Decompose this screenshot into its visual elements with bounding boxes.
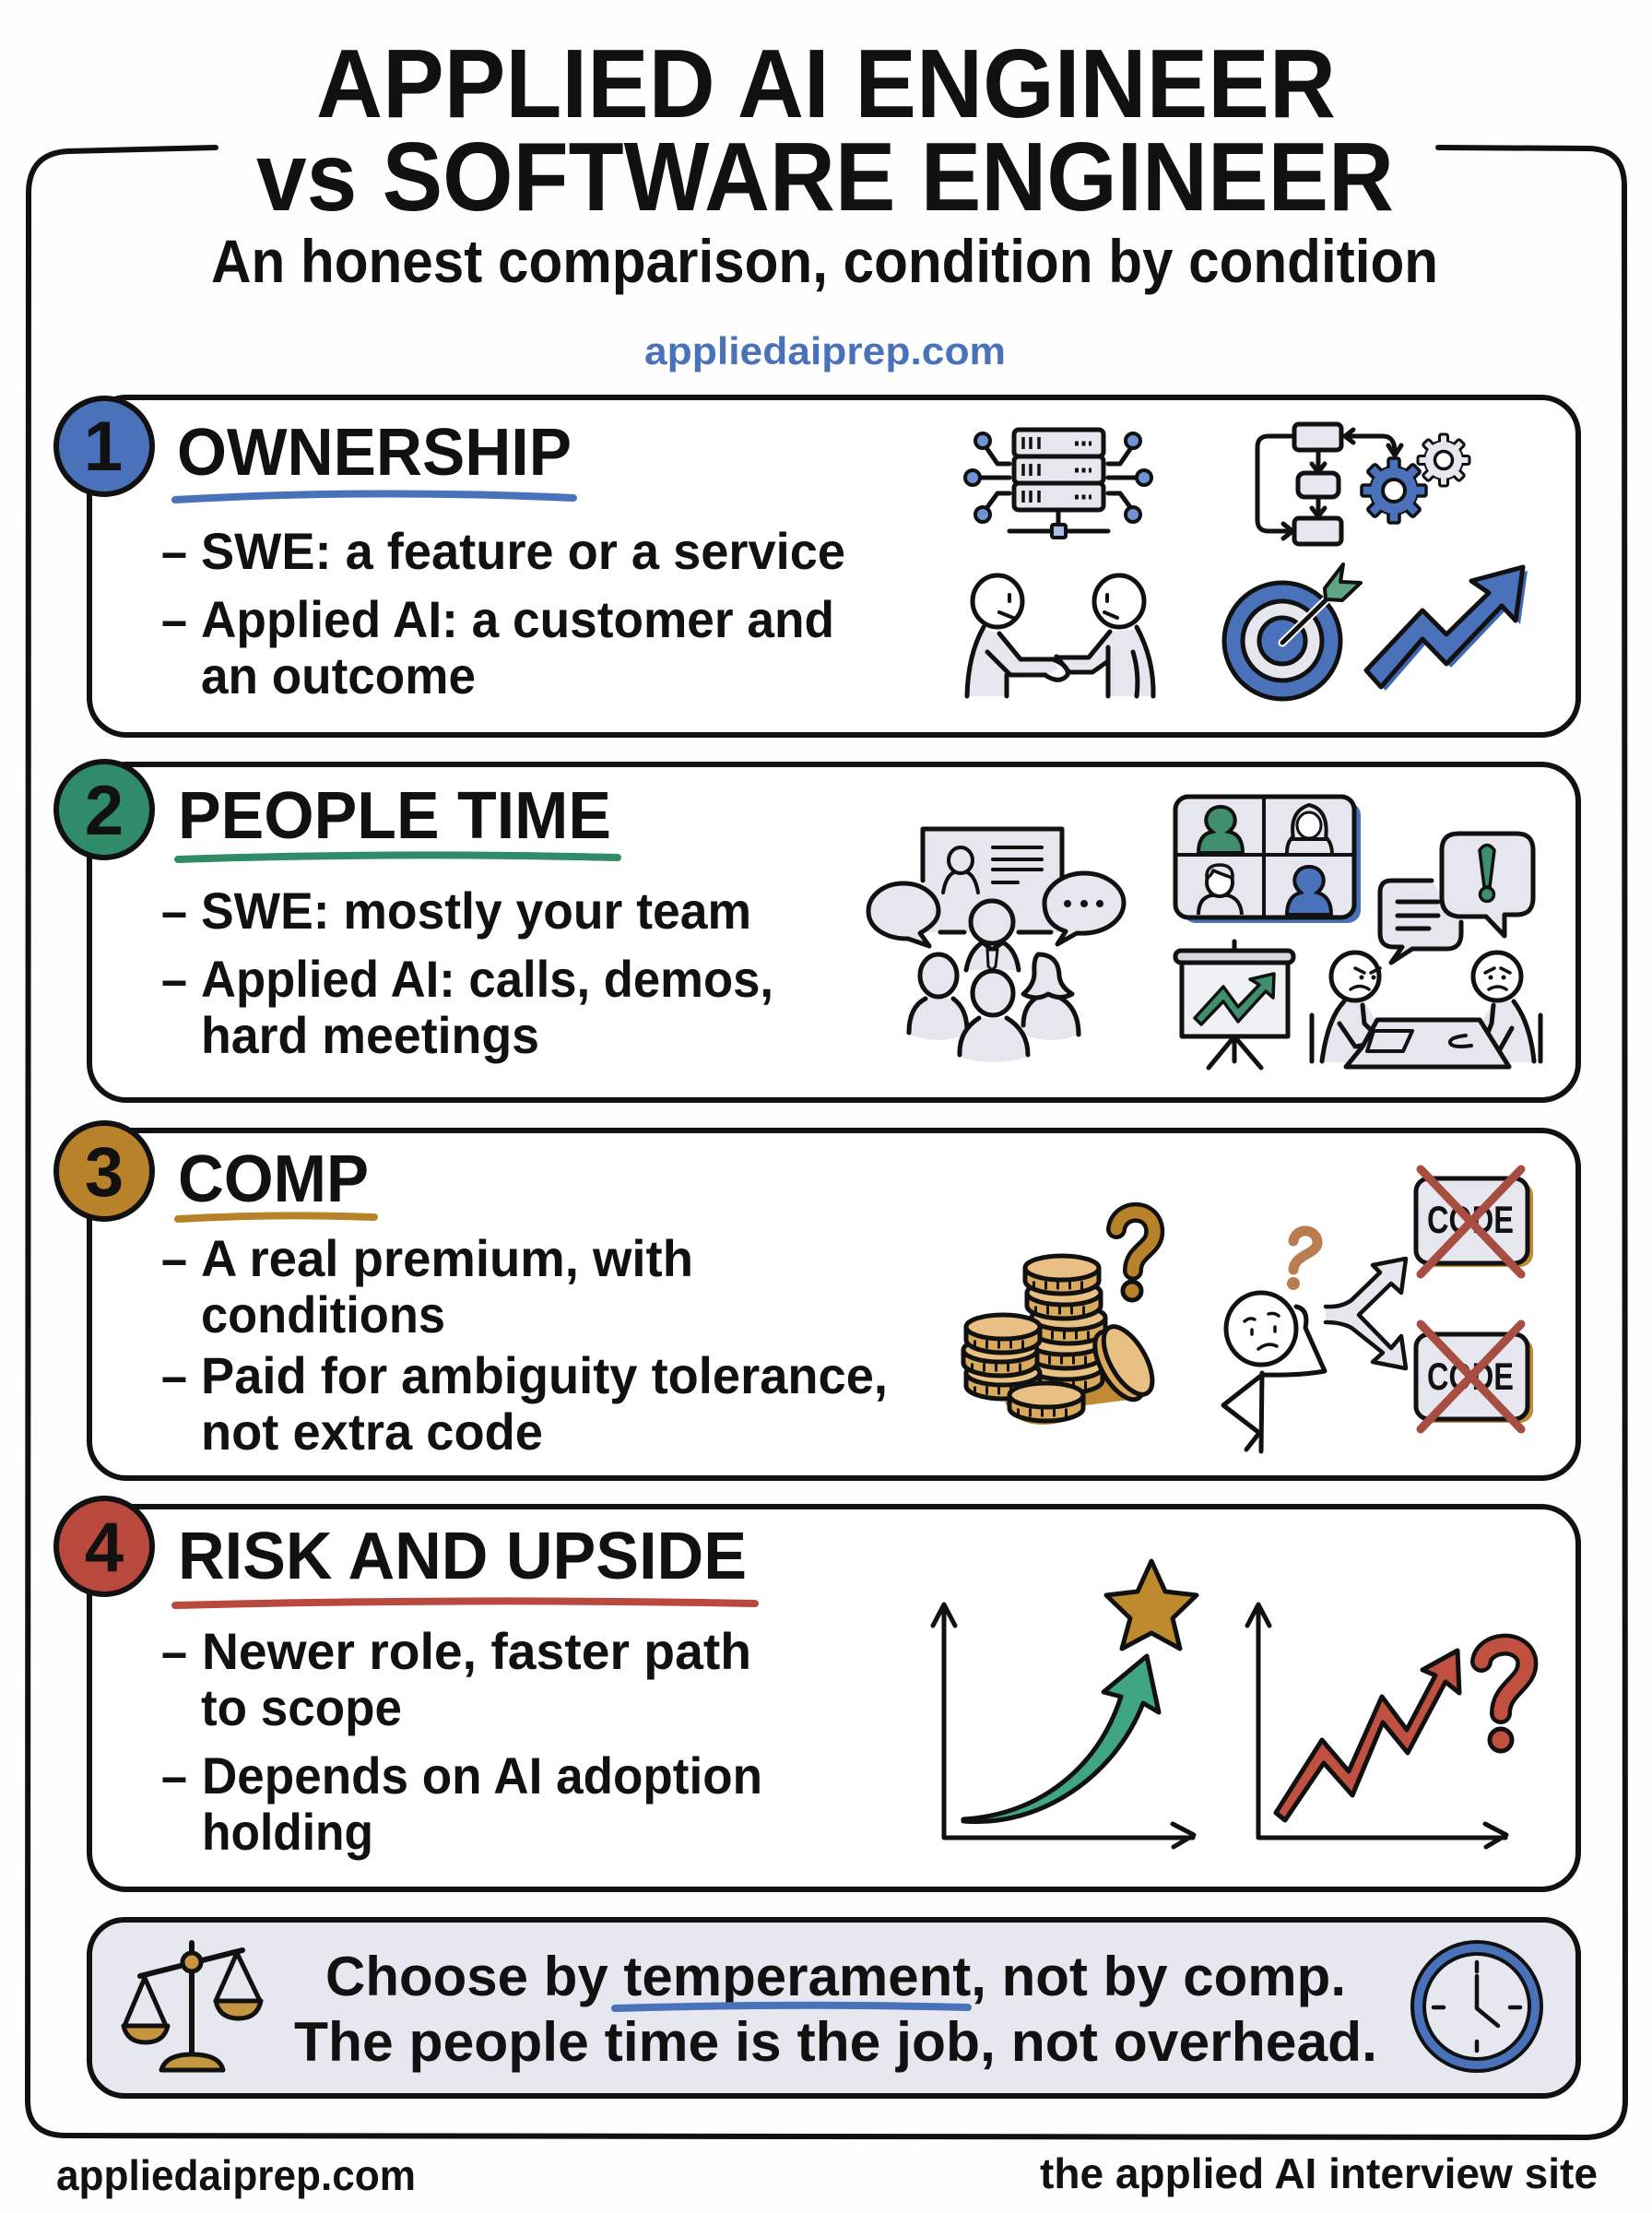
- icon: tense meeting at table: [1312, 953, 1540, 1067]
- bullets: holding: [202, 1803, 373, 1861]
- bullets: –: [161, 590, 187, 648]
- bullets: SWE: a feature or a service: [201, 522, 845, 580]
- subtitle: An honest comparison, condition by condition: [211, 227, 1438, 295]
- badge 1: 1: [84, 408, 123, 486]
- icon: chat bubbles with alert: [1380, 834, 1533, 963]
- underline: [175, 1601, 755, 1605]
- bullets: Applied AI: calls, demos,: [201, 950, 773, 1008]
- title: vs SOFTWARE ENGINEER: [256, 123, 1394, 231]
- icon: rising arrow: [1366, 567, 1528, 691]
- bullets: –: [161, 1229, 187, 1287]
- callout text: Choose by temperament, not by comp.: [325, 1946, 1346, 2007]
- bullets: [161, 1229, 888, 1461]
- question mark icon: red: [1481, 1645, 1527, 1751]
- bullets: to scope: [201, 1678, 402, 1736]
- bullets: A real premium, with: [201, 1229, 693, 1287]
- heading: ownership: OWNERSHIP: [177, 416, 572, 490]
- callout text: The people time is the job, not overhead.: [294, 2011, 1377, 2073]
- question mark icon: gold: [1116, 1213, 1154, 1300]
- box: code crossed out bottom: [1416, 1324, 1533, 1429]
- bullets: [161, 882, 773, 1064]
- panel: risk and upside: [56, 1498, 1578, 1889]
- underline: [175, 493, 573, 500]
- badge 4: 4: [85, 1509, 124, 1587]
- icon: target with arrow: [1224, 564, 1361, 699]
- panel: comp: [56, 1123, 1578, 1478]
- question mark icon: orange: [1287, 1231, 1317, 1290]
- bullets: –: [161, 1346, 187, 1404]
- bullets: –: [161, 1622, 187, 1680]
- exclamation mark icon: [1480, 845, 1494, 902]
- underline: [178, 1215, 374, 1219]
- chart: volatile line with question: [1247, 1604, 1527, 1847]
- bullets: Depends on AI adoption: [202, 1746, 762, 1805]
- box: code crossed out top: CODE: [1427, 1198, 1514, 1241]
- badge 1: [56, 398, 152, 494]
- callout: takeaway: [89, 1920, 1578, 2096]
- icon: presentation easel: [1175, 941, 1293, 1068]
- bullets: an outcome: [201, 646, 476, 704]
- site link: appliedaiprep.com: [644, 329, 1006, 373]
- gear: blue: [1362, 458, 1426, 523]
- bullets: SWE: mostly your team: [201, 882, 751, 940]
- badge 4: [56, 1498, 152, 1594]
- footer right: the applied AI interview site: [1040, 2149, 1598, 2197]
- icon: video call grid: [1175, 797, 1361, 923]
- bullets: –: [161, 950, 187, 1008]
- badge 3: [56, 1123, 152, 1219]
- icon: flowchart and gears: [1257, 424, 1469, 544]
- badge 2: [56, 762, 152, 858]
- title: [256, 30, 1394, 231]
- icon: balance scale: [124, 1943, 261, 2070]
- callout text: [294, 1946, 1377, 2073]
- icon: handshake: [967, 575, 1153, 696]
- icon: clock: [1412, 1942, 1541, 2071]
- bullets: Paid for ambiguity tolerance,: [201, 1346, 888, 1404]
- bullets: [161, 522, 845, 704]
- panel: ownership: [56, 397, 1578, 735]
- bullets: Applied AI: a customer and: [201, 590, 834, 648]
- gear: gray: [1418, 434, 1469, 486]
- heading: comp: COMP: [178, 1142, 369, 1216]
- bullets: not extra code: [201, 1402, 543, 1461]
- bullets: hard meetings: [201, 1006, 539, 1064]
- chart: curve to star: [933, 1561, 1197, 1847]
- icon: confused person at fork: [1223, 1169, 1533, 1451]
- bullets: conditions: [201, 1285, 445, 1343]
- icon: meeting audience with speech bubbles: [868, 829, 1124, 1062]
- underline: temperament: [615, 2006, 968, 2008]
- panel: people time: [56, 762, 1578, 1100]
- heading: people time: PEOPLE TIME: [178, 779, 611, 853]
- icon: server network: [965, 430, 1151, 538]
- footer left: appliedaiprep.com: [56, 2151, 416, 2199]
- title: APPLIED AI ENGINEER: [316, 30, 1336, 138]
- underline: [178, 855, 618, 859]
- bullets: [161, 1622, 762, 1861]
- bullets: –: [161, 882, 187, 940]
- bullets: Newer role, faster path: [202, 1622, 751, 1680]
- icon: coin stacks with question mark: [963, 1213, 1162, 1425]
- box: code crossed out top: [1416, 1169, 1533, 1274]
- badge 2: 2: [85, 772, 124, 850]
- badge 3: 3: [85, 1133, 124, 1212]
- box: code crossed out bottom: CODE: [1427, 1355, 1514, 1398]
- heading: risk and upside: RISK AND UPSIDE: [178, 1520, 747, 1593]
- bullets: –: [161, 522, 187, 580]
- bullets: –: [161, 1746, 187, 1805]
